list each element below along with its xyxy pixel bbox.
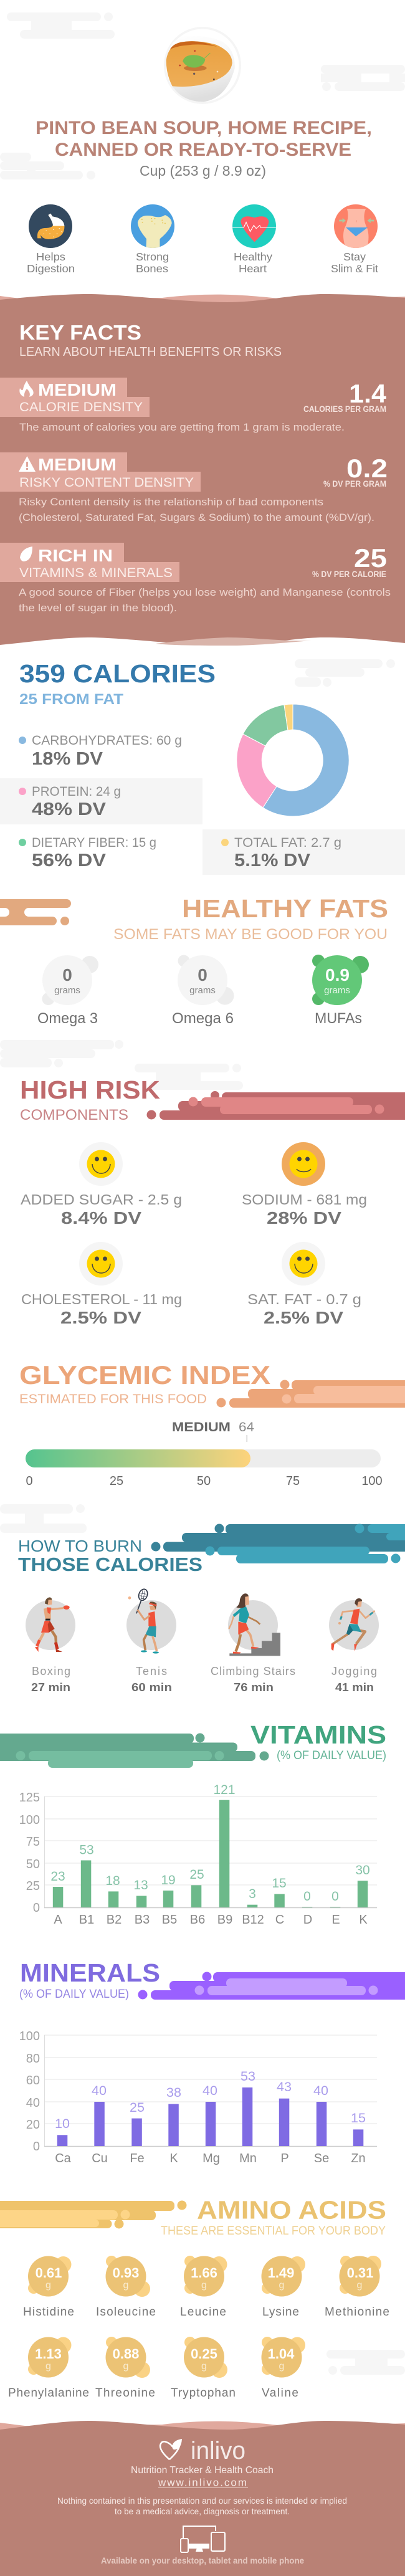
tagline: Nutrition Tracker & Health Coach — [131, 2465, 274, 2476]
disclaimer — [57, 2496, 347, 2516]
bar chart: minerals — [19, 2030, 377, 2165]
amino: phenylalanine: 1.13 — [35, 2346, 62, 2362]
fact: rich in vitamins and minerals: RICH IN — [38, 546, 113, 565]
amino: threonine — [95, 2337, 155, 2400]
activity: tennis: 60 min — [131, 1681, 172, 1694]
legend: dietary fiber — [19, 836, 156, 871]
legend: total fat — [202, 829, 405, 875]
gauge axis: 0 — [26, 1474, 33, 1488]
panel: calories — [0, 659, 405, 875]
item: added sugar: ADDED SUGAR - 2.5 g — [21, 1191, 182, 1208]
fact: calorie density: CALORIES PER GRAM — [303, 404, 386, 414]
item: added sugar — [21, 1142, 182, 1228]
fact: risky content density: RISKY CONTENT DENSITY — [19, 475, 194, 490]
legend: protein — [0, 778, 202, 824]
bar chart: minerals: Mg — [202, 2152, 220, 2165]
fact: risky content density: % DV PER GRAM — [323, 479, 386, 489]
amino: valine: 1.04 — [268, 2346, 295, 2362]
activity: jogging: Jogging — [331, 1665, 377, 1677]
fact: rich in vitamins and minerals — [0, 543, 391, 614]
title — [36, 118, 372, 160]
fact: risky content density: Risky Content density is the relationship of bad components — [19, 496, 323, 508]
bar chart: vitamins: K — [359, 1913, 368, 1927]
fact: calorie density: MEDIUM — [38, 380, 117, 399]
bar chart: vitamins: 0 — [303, 1889, 311, 1904]
item: sodium: SODIUM - 681 mg — [242, 1191, 367, 1208]
panel: minerals — [19, 1958, 405, 2165]
gauge label: 64 — [239, 1420, 254, 1434]
amino: lysine — [262, 2256, 305, 2319]
amino: methionine: 0.31 — [347, 2265, 373, 2281]
fact: risky content density: MEDIUM — [38, 455, 117, 474]
fact: risky content density: (Cholesterol, Saturated Fat, Sugars & Sodium) to the amount (%DV/gr). — [19, 512, 374, 523]
bar chart: vitamins: B6 — [190, 1913, 205, 1927]
fact: risky content density — [0, 452, 388, 523]
bar chart: minerals: 40 — [26, 2096, 40, 2110]
activity: jogging: 41 min — [335, 1681, 374, 1694]
bar chart: vitamins: C — [275, 1913, 284, 1927]
activity: tennis: Tenis — [136, 1665, 167, 1677]
bar chart: minerals: 10 — [55, 2116, 70, 2131]
amino: leucine: g — [201, 2280, 207, 2291]
subheading: minerals: (% OF DAILY VALUE) — [19, 1988, 129, 2001]
fact: rich in vitamins and minerals: % DV PER CALORIE — [312, 570, 386, 579]
fact: risky content density: 0.2 — [346, 454, 388, 483]
activity: climbing stairs: Climbing Stairs — [211, 1665, 295, 1677]
bar chart: minerals: 40 — [92, 2083, 107, 2098]
gauge bar — [26, 1449, 381, 1467]
amino: isoleucine: Isoleucine — [96, 2306, 156, 2319]
subheading: key facts: LEARN ABOUT HEALTH BENEFITS OR RISKS — [19, 345, 282, 359]
bar chart: vitamins: A — [54, 1913, 62, 1927]
bar chart: vitamins: 19 — [161, 1873, 176, 1887]
omega 6 — [172, 955, 234, 1027]
subheading: from fat: 25 FROM FAT — [19, 691, 123, 708]
item: added sugar: 8.4% DV — [61, 1208, 141, 1228]
bar chart: vitamins: B3 — [135, 1913, 150, 1927]
amino: leucine: 1.66 — [191, 2265, 217, 2281]
soup bowl photo — [164, 27, 241, 104]
activity: tennis — [126, 1588, 176, 1694]
bar chart: minerals: K — [169, 2152, 178, 2165]
amino: histidine: g — [45, 2280, 51, 2291]
amino: threonine: g — [123, 2361, 128, 2372]
amino: threonine: 0.88 — [113, 2346, 139, 2362]
activity: climbing stairs: 76 min — [234, 1681, 274, 1694]
omega 3: 0 — [62, 965, 72, 985]
bar chart: minerals: 20 — [26, 2118, 40, 2132]
bar chart: vitamins: 50 — [26, 1858, 40, 1871]
decorative bar: glycemic — [217, 1380, 405, 1408]
decorative bar: minerals — [138, 1972, 405, 2000]
amino: methionine: Methionine — [325, 2306, 389, 2319]
bar chart: vitamins: 25 — [26, 1879, 40, 1893]
gauge label: MEDIUM — [172, 1420, 231, 1434]
fact: rich in vitamins and minerals: A good source of Fiber (helps you lose weight) and Manganese (controls — [19, 586, 391, 598]
bar chart: vitamins: 53 — [79, 1843, 94, 1857]
amino: tryptophan — [171, 2337, 236, 2400]
fact: calorie density: CALORIE DENSITY — [19, 400, 143, 414]
legend: total fat: 5.1% DV — [234, 851, 311, 871]
bar chart: minerals: 15 — [351, 2111, 366, 2125]
heading: minerals: MINERALS — [20, 1958, 160, 1987]
bar chart: vitamins: 3 — [249, 1887, 256, 1901]
heading: how to burn: HOW TO BURN — [18, 1537, 142, 1555]
amino: tryptophan: 0.25 — [191, 2346, 217, 2362]
website link: www.inlivo.com — [158, 2476, 247, 2489]
bar chart: vitamins: E — [331, 1913, 340, 1927]
benefit: strong bones — [131, 204, 174, 275]
bar chart: vitamins: B9 — [217, 1913, 232, 1927]
bar chart: minerals: 38 — [166, 2085, 181, 2100]
disclaimer: to be a medical advice, diagnosis or treatment. — [115, 2506, 290, 2516]
panel: footer — [0, 2421, 405, 2576]
title: PINTO BEAN SOUP, HOME RECIPE, — [36, 118, 372, 138]
panel: how to burn calories — [18, 1524, 405, 1694]
amino: valine: g — [279, 2361, 284, 2372]
bar chart: minerals: P — [280, 2152, 289, 2165]
gauge axis: 75 — [286, 1474, 300, 1488]
panel: amino acids — [0, 2196, 389, 2400]
amino: phenylalanine — [8, 2337, 89, 2400]
bar chart: vitamins: B2 — [107, 1913, 122, 1927]
legend: dietary fiber: 56% DV — [32, 851, 107, 871]
amino: methionine: g — [357, 2280, 362, 2291]
panel: healthy fats — [0, 894, 388, 1027]
subheading: estimated: ESTIMATED FOR THIS FOOD — [19, 1392, 207, 1406]
decorative bar: vitamins — [0, 1734, 269, 1768]
amino: leucine: Leucine — [180, 2306, 226, 2319]
bar chart: minerals: Cu — [92, 2152, 108, 2165]
amino: lysine: g — [279, 2280, 284, 2291]
benefit: strong bones: Strong — [136, 250, 169, 263]
mufas: 0.9 — [325, 965, 350, 985]
legend: dietary fiber: DIETARY FIBER: 15 g — [32, 836, 156, 850]
legend: protein: 48% DV — [32, 799, 107, 819]
amino: threonine: Threonine — [95, 2387, 155, 2400]
amino: phenylalanine: Phenylalanine — [8, 2387, 89, 2400]
panel: high risk components — [20, 1076, 405, 1327]
benefit: stay slim and fit: Stay — [343, 250, 366, 263]
icon: flame — [19, 381, 34, 397]
bar chart: minerals: 0 — [33, 2140, 40, 2154]
item: sodium: 28% DV — [267, 1208, 341, 1228]
omega 3: Omega 3 — [37, 1010, 98, 1027]
bar chart: minerals: Zn — [351, 2152, 366, 2165]
benefit: helps digestion — [27, 204, 75, 275]
item: sodium — [242, 1142, 367, 1228]
disclaimer: Nothing contained in this presentation and our services is intended or implied — [57, 2496, 347, 2506]
fact: rich in vitamins and minerals: 25 — [354, 543, 387, 573]
omega 6: grams — [189, 985, 216, 996]
icon: devices — [181, 2526, 225, 2552]
bar chart: minerals: 100 — [19, 2030, 40, 2043]
bar chart: vitamins: 25 — [189, 1868, 204, 1882]
bar chart: minerals: 60 — [26, 2074, 40, 2087]
decorative bar: burn — [151, 1524, 405, 1563]
bar chart: minerals: 53 — [241, 2069, 255, 2084]
benefit: helps digestion: Digestion — [27, 262, 75, 275]
legend: total fat: TOTAL FAT: 2.7 g — [234, 836, 341, 850]
bar chart: vitamins: 13 — [133, 1878, 148, 1892]
amino: valine — [262, 2337, 305, 2400]
decorative bar: high risk — [147, 1091, 405, 1120]
bar chart: vitamins: B12 — [242, 1913, 264, 1927]
benefit: healthy heart: Healthy — [234, 250, 272, 263]
decorative bar: amino acids — [0, 2201, 187, 2228]
gauge axis: 100 — [361, 1474, 383, 1488]
icon: leaf — [20, 546, 32, 561]
bar chart: vitamins: 0 — [331, 1889, 339, 1904]
activity: boxing: 27 min — [31, 1681, 70, 1694]
availability note: Available on your desktop, tablet and mobile phone — [101, 2555, 304, 2565]
bar chart: minerals: 43 — [277, 2079, 292, 2094]
mufas — [312, 955, 369, 1027]
bar chart: vitamins: 125 — [19, 1791, 40, 1805]
bar chart: vitamins: 23 — [50, 1869, 65, 1884]
title: CANNED OR READY-TO-SERVE — [55, 140, 351, 160]
amino: isoleucine: 0.93 — [113, 2265, 139, 2281]
fact: calorie density: 1.4 — [349, 379, 387, 408]
amino: lysine: Lysine — [262, 2306, 299, 2319]
heading: healthy fats: HEALTHY FATS — [182, 894, 388, 923]
panel: key facts — [0, 294, 405, 648]
bar chart: minerals: Ca — [55, 2152, 72, 2165]
heading: glycemic index: GLYCEMIC INDEX — [19, 1360, 270, 1390]
bar chart: vitamins: B5 — [162, 1913, 177, 1927]
benefit: stay slim and fit — [331, 204, 378, 275]
fact: rich in vitamins and minerals: VITAMINS & MINERALS — [19, 566, 173, 580]
activity: boxing: Boxing — [32, 1665, 70, 1677]
amino: tryptophan: g — [201, 2361, 207, 2372]
item: saturated fat: 2.5% DV — [264, 1308, 343, 1327]
bar chart: minerals: Se — [314, 2152, 329, 2165]
amino: leucine — [180, 2256, 227, 2319]
bar chart: vitamins: 100 — [19, 1813, 40, 1827]
gauge axis — [26, 1474, 383, 1488]
gauge axis: 25 — [110, 1474, 123, 1488]
donut chart: macronutrients — [237, 704, 349, 816]
logo: inlivo: inlivo — [191, 2437, 245, 2464]
amino: methionine — [325, 2256, 389, 2319]
legend: carbohydrates — [19, 733, 182, 769]
fact: calorie density: The amount of calories you are getting from 1 gram is moderate. — [19, 421, 345, 433]
omega 3: grams — [54, 985, 80, 996]
logo: inlivo — [160, 2437, 245, 2464]
panel: vitamins — [0, 1720, 386, 1927]
heading: key facts: KEY FACTS — [19, 321, 141, 344]
bar chart: vitamins: 75 — [26, 1835, 40, 1849]
bar chart: vitamins: 30 — [355, 1863, 370, 1877]
bar chart: vitamins — [19, 1783, 377, 1927]
amino: histidine: 0.61 — [36, 2265, 62, 2281]
mufas: MUFAs — [315, 1010, 362, 1027]
activity: climbing stairs — [211, 1593, 295, 1694]
item: cholesterol — [21, 1242, 182, 1327]
amino: isoleucine: g — [123, 2280, 128, 2291]
omega 6: 0 — [198, 965, 207, 985]
legend: protein: PROTEIN: 24 g — [32, 785, 121, 799]
benefit: healthy heart: Heart — [239, 262, 267, 275]
legend: carbohydrates: CARBOHYDRATES: 60 g — [32, 733, 182, 748]
item: saturated fat: SAT. FAT - 0.7 g — [247, 1291, 361, 1307]
amino: isoleucine — [96, 2256, 156, 2319]
amino: histidine — [23, 2256, 74, 2319]
amino: tryptophan: Tryptophan — [171, 2387, 236, 2400]
mufas: grams — [324, 985, 350, 996]
subheading: components: COMPONENTS — [20, 1107, 128, 1123]
heading: those calories: THOSE CALORIES — [18, 1553, 202, 1575]
amino: lysine: 1.49 — [268, 2265, 294, 2281]
fact: rich in vitamins and minerals: the level of sugar in the blood). — [19, 602, 177, 614]
bar chart: minerals: 40 — [202, 2083, 217, 2098]
amino: histidine: Histidine — [23, 2306, 74, 2319]
benefit: helps digestion: Helps — [36, 250, 65, 263]
item: cholesterol: CHOLESTEROL - 11 mg — [21, 1291, 182, 1307]
bar chart: minerals: Fe — [130, 2152, 145, 2165]
panel: glycemic index — [19, 1360, 405, 1488]
bar chart: vitamins: 18 — [105, 1874, 120, 1888]
gauge label — [172, 1420, 254, 1442]
item: cholesterol: 2.5% DV — [60, 1308, 141, 1327]
omega 3 — [37, 955, 98, 1027]
activity: boxing — [26, 1597, 75, 1694]
legend: carbohydrates: 18% DV — [32, 749, 103, 769]
heading: amino acids: AMINO ACIDS — [197, 2196, 386, 2225]
decorative bar: healthy fats — [0, 899, 71, 925]
bar chart: vitamins: D — [303, 1913, 312, 1927]
benefit: strong bones: Bones — [136, 262, 168, 275]
serving size: Cup (253 g / 8.9 oz) — [140, 163, 266, 179]
bar chart: minerals: 25 — [130, 2100, 145, 2115]
bar chart: minerals: 80 — [26, 2052, 40, 2066]
bar chart: minerals: Mn — [239, 2152, 257, 2165]
activity: jogging — [329, 1598, 379, 1694]
heading: high risk: HIGH RISK — [20, 1076, 160, 1104]
subheading: amino acids: THESE ARE ESSENTIAL FOR YOUR BODY — [161, 2225, 386, 2238]
subheading: healthy fats: SOME FATS MAY BE GOOD FOR YOU — [113, 926, 388, 943]
bar chart: vitamins: 0 — [33, 1901, 40, 1915]
heading: calories: 359 CALORIES — [19, 659, 216, 688]
icon: warning — [19, 456, 36, 472]
amino: valine: Valine — [262, 2387, 298, 2400]
bar chart: minerals: 40 — [313, 2083, 328, 2098]
benefit: stay slim and fit: Slim & Fit — [331, 262, 378, 275]
subheading: vitamins: (% OF DAILY VALUE) — [277, 1749, 386, 1762]
item: saturated fat — [247, 1242, 361, 1327]
bar chart: vitamins: 15 — [272, 1876, 287, 1891]
fact: calorie density — [0, 378, 387, 433]
omega 6: Omega 6 — [172, 1010, 234, 1027]
heading: vitamins: VITAMINS — [250, 1720, 386, 1749]
gauge axis: 50 — [197, 1474, 211, 1488]
bar chart: vitamins: B1 — [79, 1913, 94, 1927]
amino: phenylalanine: g — [45, 2361, 51, 2372]
bar chart: vitamins: 121 — [213, 1783, 236, 1797]
benefit: healthy heart — [232, 204, 276, 275]
